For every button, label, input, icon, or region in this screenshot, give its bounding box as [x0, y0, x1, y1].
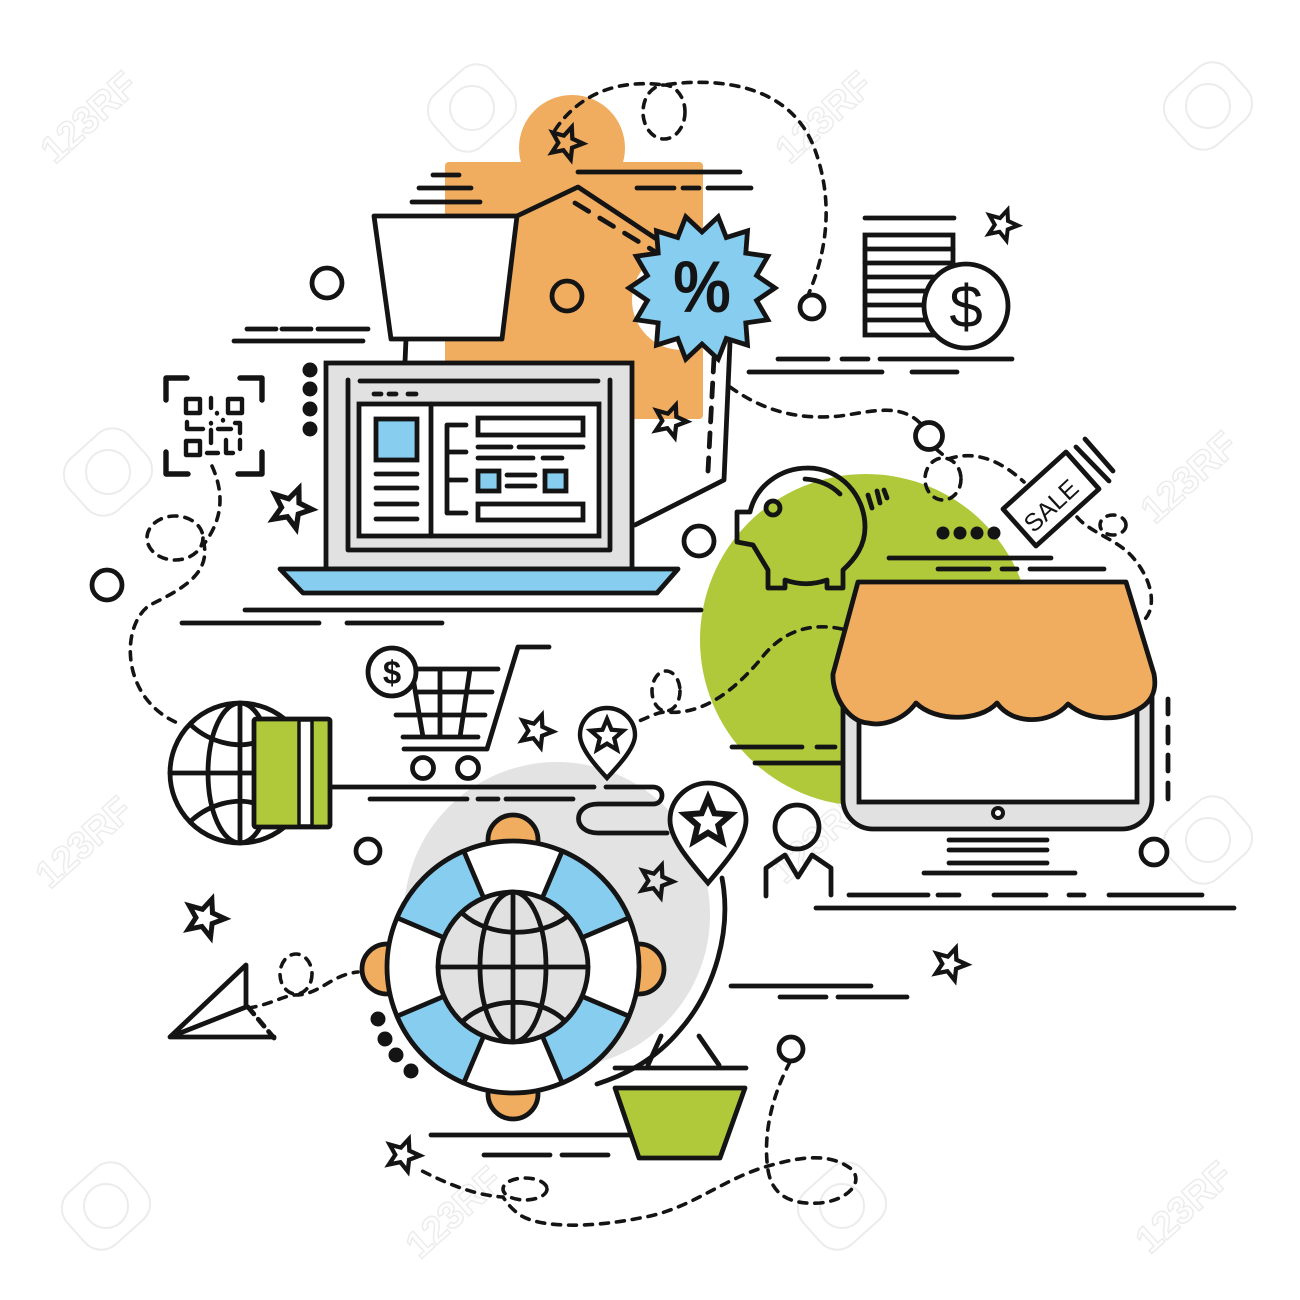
dashed path: QR to globe	[130, 466, 220, 724]
star near cart	[516, 710, 557, 749]
blue segments	[397, 851, 629, 1083]
sale tag: SALE	[1019, 474, 1084, 538]
person icon	[766, 805, 831, 896]
coins stack with dollar	[865, 218, 1008, 348]
gray circle behind lifebuoy	[404, 762, 710, 1068]
coins stack with dollar: $	[949, 273, 983, 340]
decorative circle far left	[92, 570, 122, 600]
lifebuoy handles	[362, 815, 664, 1119]
monitor stand lines	[924, 840, 1075, 873]
shopping cart	[368, 647, 549, 778]
watermark pattern: 123RF	[1128, 1154, 1241, 1262]
store awning	[833, 582, 1155, 724]
center globe	[438, 892, 588, 1042]
laptop	[280, 363, 678, 593]
star bottom	[383, 1134, 424, 1173]
watermark pattern: 123RF	[1133, 424, 1246, 532]
lifebuoy with globe	[362, 815, 664, 1119]
dots left of laptop	[302, 362, 318, 436]
dashed path: circle to sale tag	[936, 449, 1024, 482]
star left	[182, 893, 230, 940]
star right of center	[930, 943, 971, 982]
watermark pattern: 123RF	[398, 1159, 511, 1267]
piggy bank	[737, 468, 887, 588]
decorative circle left of bag	[312, 268, 342, 298]
decorative circle near laptop	[684, 526, 714, 556]
lines above store	[889, 558, 1104, 569]
watermark pattern: 123RF	[28, 789, 141, 897]
watermark pattern: 123RF	[768, 64, 881, 172]
shopping basket	[615, 1036, 746, 1158]
dashed path: pin to store	[635, 627, 842, 722]
ring	[387, 841, 639, 1093]
credit card	[254, 719, 330, 827]
globe	[170, 703, 310, 843]
dashed loop oval left	[147, 516, 203, 560]
large map pin	[670, 783, 746, 883]
connector line from card	[331, 787, 667, 833]
star left of laptop	[266, 481, 317, 531]
watermark pattern: 123RF	[413, 419, 526, 527]
dashed path: bottom	[416, 1062, 856, 1225]
dashed path: sale tag to awning	[1077, 517, 1151, 620]
lines right of lifebuoy	[731, 986, 907, 997]
dashed loop near pin	[652, 671, 680, 711]
paper plane	[170, 965, 274, 1038]
small circle on tag	[552, 281, 582, 311]
decorative circle near monitor	[1141, 839, 1167, 865]
watermark pattern: 123RF	[33, 64, 146, 172]
dashed loop near sale	[925, 458, 961, 500]
dashed loop near plane	[280, 954, 312, 994]
discount badge	[629, 217, 775, 359]
discount badge: %	[673, 245, 731, 328]
QR code scan	[166, 378, 262, 474]
dashed loop oval top	[643, 85, 685, 139]
dashed loop right of sale	[1100, 515, 1126, 535]
decorative circle at end of path	[800, 295, 824, 319]
sale tag	[1003, 439, 1113, 546]
dashes right of monitor	[1166, 699, 1170, 799]
monitor	[843, 695, 1152, 829]
decorative circle left of lifebuoy	[356, 839, 380, 863]
dashed path: plane to lifebuoy	[248, 972, 358, 1008]
dots above store	[936, 526, 1000, 540]
speed lines: around price tag	[234, 172, 751, 341]
arc line around lifebuoy	[597, 878, 725, 1084]
star near coins	[983, 205, 1022, 242]
lines under coins	[749, 359, 1012, 372]
dots below lifebuoy	[370, 1012, 418, 1078]
dashed loop bottom	[503, 1178, 547, 1200]
shopping cart: $	[383, 654, 401, 691]
watermark pattern: 123RF	[763, 784, 876, 892]
dashed path: tag to circle	[730, 387, 921, 424]
star on orange top	[546, 122, 587, 161]
lines under monitor	[816, 895, 1234, 908]
star on gray circle	[636, 860, 677, 899]
green circle behind store	[700, 474, 1032, 806]
small map pin	[580, 708, 635, 778]
lines left of basket	[431, 1135, 630, 1155]
star on orange bottom	[650, 400, 691, 439]
lines under laptop	[182, 610, 701, 623]
decorative circle on path	[916, 422, 942, 450]
orange puzzle shape behind laptop	[445, 95, 743, 419]
lines left of monitor	[732, 747, 842, 763]
price tag: bag and string	[374, 187, 730, 525]
decorative circle above dashed path	[779, 1037, 803, 1061]
dashed path: star to coins	[555, 82, 826, 293]
